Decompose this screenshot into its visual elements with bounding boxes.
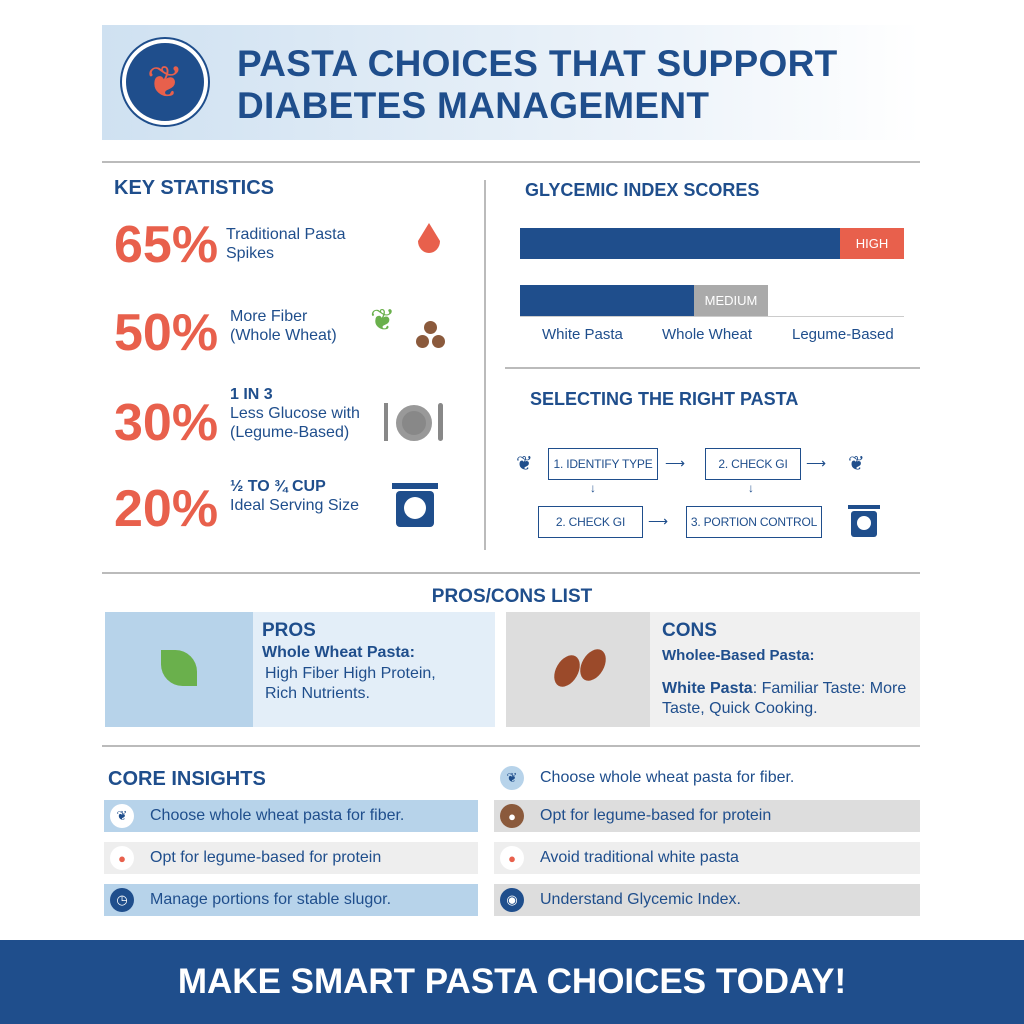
footer banner: MAKE SMART PASTA CHOICES TODAY! (178, 962, 846, 1001)
panel: glycemic index chart: Whole Wheat (662, 326, 752, 343)
axis labels: White Pasta (542, 326, 623, 343)
stat 30: 1 IN 3 (230, 386, 273, 403)
panel: selecting flowchart (516, 389, 880, 538)
panel: core insights: ◷ (116, 892, 128, 907)
stat 65: 65% (114, 216, 218, 274)
panel: core insights: Avoid traditional white pasta (540, 849, 739, 866)
panel: pros: PROS (262, 620, 316, 641)
stat 30 (114, 386, 443, 452)
panel: selecting flowchart: ↓ (590, 481, 596, 495)
panel: core insights: Choose whole wheat pasta for fiber. (540, 769, 794, 786)
footer banner (0, 940, 1024, 1024)
panel: core insights: ❦ (117, 808, 127, 823)
stat 50: ❦ (370, 304, 395, 337)
stat 50 (114, 304, 445, 362)
panel: core insights (104, 766, 920, 916)
stat 50: (Whole Wheat) (230, 327, 337, 344)
panel: selecting flowchart: ⟶ (806, 455, 826, 471)
panel: core insights: Choose whole wheat pasta for fiber. (150, 807, 404, 824)
stat 65 (114, 216, 440, 274)
icon: wheat logo: ❦ (147, 58, 183, 106)
panel: core insights: ◉ (506, 892, 518, 907)
bar medium (520, 285, 768, 316)
stat 65: Traditional Pasta (226, 226, 345, 243)
panel: selecting flowchart: 2. CHECK GI (556, 515, 625, 529)
title: DIABETES MANAGEMENT (237, 85, 709, 126)
heading: pros/cons: PROS/CONS LIST (432, 586, 592, 607)
panel: cons: White Pasta: Familiar Taste: More (662, 680, 906, 697)
heading: KEY STATISTICS (114, 177, 274, 199)
stat 50: More Fiber (230, 308, 307, 325)
panel: core insights: Understand Glycemic Index. (540, 891, 741, 908)
stat 65: Spikes (226, 245, 274, 262)
panel: cons: Taste, Quick Cooking. (662, 700, 818, 717)
panel: core insights: Opt for legume-based for protein (150, 849, 381, 866)
panel: selecting flowchart: ⟶ (665, 455, 685, 471)
panel: core insights: ● (118, 850, 126, 866)
stat 30: Less Glucose with (230, 405, 360, 422)
panel: pros: Whole Wheat Pasta: (262, 644, 415, 661)
panel: core insights: ● (508, 850, 516, 866)
stat 20: ½ TO ¾ CUP (230, 478, 326, 495)
panel: selecting flowchart: 3. PORTION CONTROL (691, 515, 817, 529)
panel: selecting flowchart: 2. CHECK GI (718, 457, 788, 471)
stat 30: 30% (114, 394, 218, 452)
panel: selecting flowchart: ❦ (516, 453, 533, 475)
panel: core insights: Opt for legume-based for protein (540, 807, 771, 824)
panel: cons: CONS (662, 620, 717, 641)
panel: glycemic index chart: GLYCEMIC INDEX SCORES (525, 180, 759, 200)
stat 20: Ideal Serving Size (230, 497, 359, 514)
header banner (102, 25, 920, 140)
panel: cons: Wholee-Based Pasta: (662, 647, 815, 664)
panel: core insights: ● (508, 808, 516, 824)
bar high: HIGH (856, 236, 888, 251)
panel: selecting flowchart: ↓ (748, 481, 754, 495)
bar medium: MEDIUM (705, 293, 757, 308)
panel: glycemic index chart: Legume-Based (792, 326, 894, 343)
panel: pros: Rich Nutrients. (265, 685, 370, 702)
panel: pros: High Fiber High Protein, (265, 665, 436, 682)
panel: key statistics (114, 177, 445, 538)
bar high (520, 228, 904, 259)
panel: core insights: Manage portions for stable slugor. (150, 891, 391, 908)
icon: wheat logo (122, 39, 208, 125)
stat 20 (114, 478, 438, 538)
title: PASTA CHOICES THAT SUPPORT (237, 43, 838, 84)
stat 50: 50% (114, 304, 218, 362)
panel: glycemic index chart (520, 180, 904, 343)
stat 30: (Legume-Based) (230, 424, 349, 441)
panel: selecting flowchart: ❦ (848, 453, 865, 475)
panel: pros (105, 612, 495, 727)
stat 20: 20% (114, 480, 218, 538)
panel: core insights: ❦ (507, 770, 517, 785)
panel: selecting flowchart: ⟶ (648, 513, 668, 529)
panel: selecting flowchart: SELECTING THE RIGHT PASTA (530, 389, 798, 409)
panel: selecting flowchart: 1. IDENTIFY TYPE (553, 457, 653, 471)
panel: core insights: CORE INSIGHTS (108, 768, 266, 790)
title (237, 43, 838, 126)
panel: cons (506, 612, 920, 727)
